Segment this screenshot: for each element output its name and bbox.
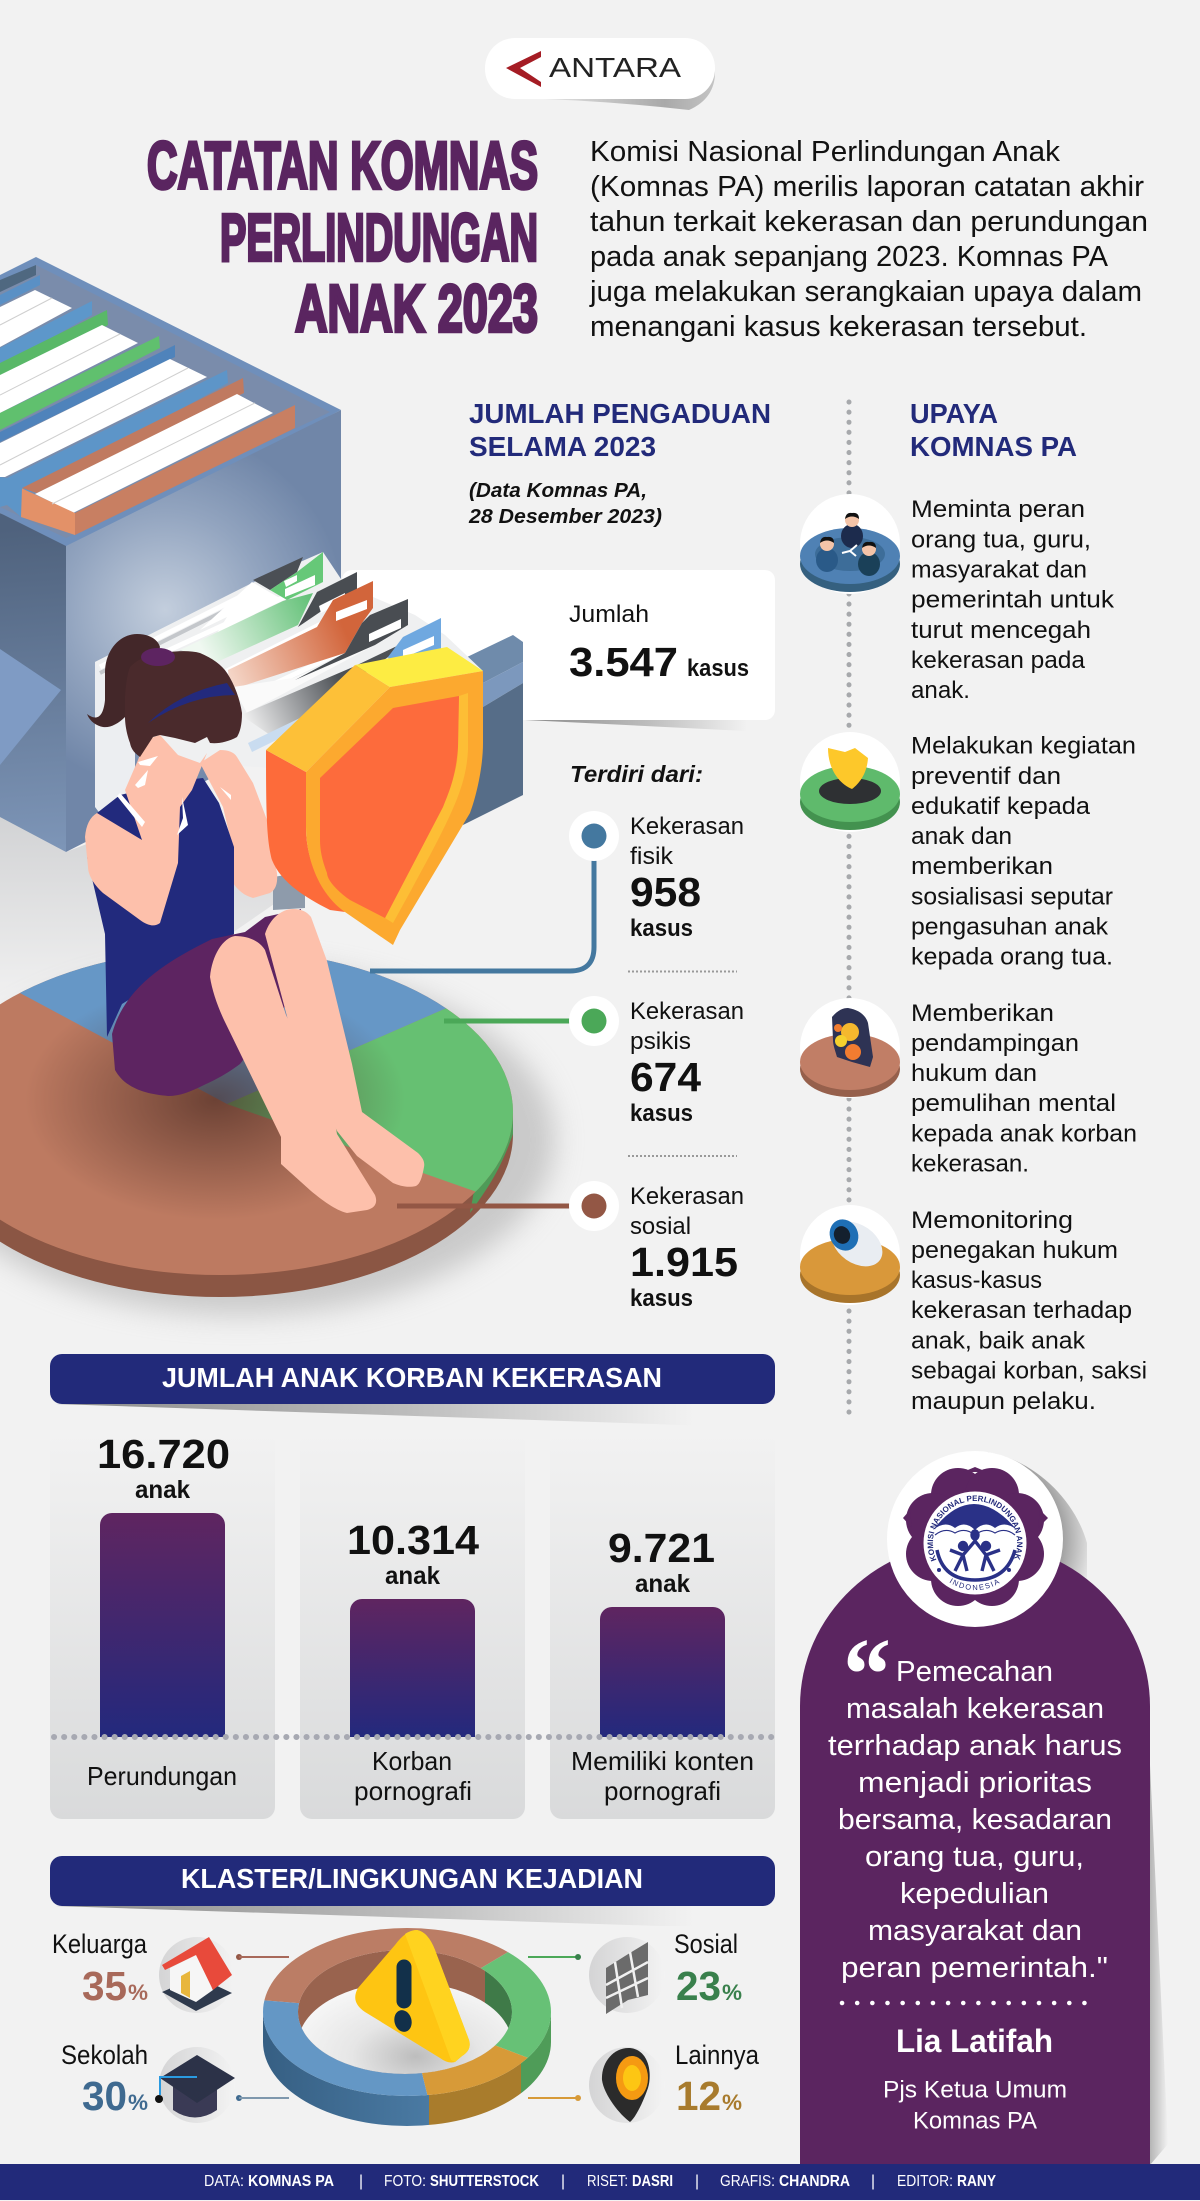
source note [468, 480, 662, 528]
item: kekerasan psikis: kasus [630, 1100, 693, 1127]
label: lainnya 12%: % [722, 2090, 742, 2115]
heading bar: jumlah anak korban: JUMLAH ANAK KORBAN KEKERASAN [162, 1362, 662, 1393]
text: upaya 4: anak, baik anak [911, 1328, 1086, 1354]
label: sosial 23%: 23 [676, 1963, 721, 2009]
icon: location pin [589, 2047, 665, 2123]
subheading: terdiri dari: Terdiri dari: [570, 761, 703, 787]
folder: green [253, 557, 303, 590]
footer credits: DATA: [204, 2173, 244, 2190]
footer credits: | [871, 2173, 875, 2190]
heading bar: klaster: KLASTER/LINGKUNGAN KEJADIAN [181, 1863, 643, 1894]
intro text: tahun terkait kekerasan dan perundungan [590, 206, 1148, 238]
item: kekerasan sosial: 1.915 [630, 1239, 738, 1285]
quote text [828, 1656, 1122, 1984]
source note: 28 Desember 2023) [468, 506, 662, 528]
quote author: Lia Latifah [896, 2023, 1053, 2059]
label: keluarga 35%: Keluarga [52, 1929, 148, 1959]
heading: upaya komnas pa: KOMNAS PA [910, 431, 1077, 462]
heading: jumlah pengaduan: JUMLAH PENGADUAN [469, 398, 771, 429]
girl: headband [148, 683, 235, 723]
label: lainnya 12%: 12 [676, 2073, 721, 2119]
hanging files [0, 265, 295, 535]
emblem: children figures [950, 1531, 1000, 1571]
label: lainnya 12% [675, 2040, 760, 2119]
quote text: orang tua, guru, [865, 1841, 1084, 1873]
footer credits: FOTO: [384, 2173, 426, 2190]
girl: left arm [85, 735, 207, 925]
heading: upaya komnas pa [910, 398, 1077, 462]
footer credits: RISET: [587, 2173, 628, 2190]
intro text: juga melakukan serangkaian upaya dalam [589, 276, 1142, 308]
text: upaya 4: kasus-kasus [911, 1267, 1042, 1294]
quote text: kepedulian [900, 1878, 1049, 1910]
item: kekerasan psikis [569, 996, 744, 1127]
text: upaya 1: turut mencegah [911, 617, 1091, 644]
icon: warning triangle [355, 1930, 470, 2062]
logo: Komnas PA emblem [887, 1451, 1063, 1627]
folder: lower blue strip [248, 718, 305, 752]
intro text: pada anak sepanjang 2023. Komnas PA [590, 241, 1109, 273]
card: jumlah total: Jumlah [569, 601, 649, 628]
column: korban pornografi [300, 1430, 525, 1819]
drawer: white column [95, 642, 135, 860]
text: upaya 2: edukatif kepada [911, 793, 1090, 820]
item: kekerasan fisik: Kekerasan [630, 813, 744, 840]
card: jumlah total [342, 570, 775, 732]
text: upaya 2 [911, 733, 1136, 971]
quote text: terrhadap anak harus [828, 1730, 1122, 1762]
intro text [589, 136, 1148, 343]
drawer: rails [100, 590, 405, 700]
footer credits: | [561, 2173, 565, 2190]
column: memiliki konten pornografi: Memiliki konten [571, 1746, 754, 1776]
icon: shield [266, 647, 483, 945]
connector: sekolah [236, 2095, 289, 2101]
text: upaya 3: kekerasan. [911, 1151, 1029, 1178]
connector: keluarga [236, 1954, 289, 1960]
item: kekerasan psikis: Kekerasan [630, 998, 744, 1025]
label: lainnya 12%: Lainnya [675, 2040, 760, 2070]
quote text: bersama, kesadaran [838, 1804, 1112, 1836]
filing cabinet [0, 257, 341, 852]
text: upaya 2: preventif dan [911, 763, 1061, 790]
text: upaya 3: pemulihan mental [911, 1090, 1116, 1117]
girl: near leg [210, 936, 376, 1213]
column: memiliki konten pornografi [550, 1430, 775, 1819]
heading: jumlah pengaduan [469, 398, 771, 462]
item: kekerasan fisik [569, 811, 744, 942]
pie disc: kekerasan segments [0, 960, 513, 1297]
donut chart: klaster [263, 1928, 551, 2126]
folder: orange [228, 581, 373, 690]
footer credits: | [359, 2173, 363, 2190]
footer credits: EDITOR: [897, 2173, 953, 2190]
intro text: menangani kasus kekerasan tersebut. [590, 311, 1087, 343]
quote panel: shadow [1150, 1765, 1168, 2165]
icon: eye [800, 1205, 900, 1305]
label: keluarga 35%: 35 [82, 1963, 127, 2009]
text: upaya 4: maupun pelaku. [911, 1388, 1096, 1415]
quote text: menjadi prioritas [858, 1767, 1092, 1799]
drawer: end panel [463, 635, 523, 825]
label: keluarga 35%: % [128, 1980, 148, 2005]
open drawer with folders [95, 552, 523, 910]
emblem: flower [903, 1467, 1048, 1606]
quote text: peran pemerintah." [841, 1952, 1108, 1984]
heading bar: jumlah anak korban [50, 1354, 775, 1426]
text: upaya 3: hukum dan [911, 1060, 1037, 1087]
text: upaya 3: kepada anak korban [911, 1120, 1137, 1148]
logo: ANTARA: ANTARA [549, 52, 681, 83]
text: upaya 2: kepada orang tua. [911, 944, 1113, 971]
folder: dark 2 [295, 599, 408, 680]
folder: blue [388, 618, 441, 680]
footer credits: | [695, 2173, 699, 2190]
emblem: indonesia text: INDONESIA [950, 1578, 1000, 1590]
title: ANAK 2023 [295, 272, 538, 346]
footer credits: RANY [957, 2173, 997, 2190]
footer credits: CHANDRA [779, 2173, 850, 2190]
column: perundungan: 16.720 [97, 1431, 230, 1477]
item: kekerasan fisik: kasus [630, 915, 693, 942]
label: sekolah 30%: % [128, 2090, 148, 2115]
connector: sosial [528, 1954, 581, 1960]
icon: shield on green disc [800, 732, 900, 832]
column: perundungan: anak [135, 1476, 190, 1504]
donut: inner wall [298, 1950, 512, 2074]
text: upaya 4: Memonitoring [911, 1207, 1073, 1234]
quote text: Pemecahan [896, 1656, 1053, 1688]
icon: head with gears [800, 998, 900, 1098]
folder: gray band [241, 635, 420, 737]
item: kekerasan sosial: sosial [630, 1213, 691, 1240]
donut: outer wall [263, 2014, 551, 2126]
footer credits: DASRI [632, 2173, 673, 2190]
icon: meeting people [800, 494, 900, 594]
emblem: umbrella lower line [935, 1530, 1015, 1535]
pie disc shadow [0, 965, 555, 1315]
girl: tears [135, 756, 158, 788]
title [147, 128, 538, 346]
text: upaya 1: anak. [911, 677, 970, 704]
emblem: inner circle [924, 1492, 1026, 1594]
emblem: circular text: KOMISI NASIONAL PERLINDUNGAN ANAK [927, 1496, 1023, 1562]
footer credits: SHUTTERSTOCK [430, 2173, 540, 2190]
quote author role [883, 2076, 1067, 2134]
floor shadow [0, 800, 280, 1010]
column: korban pornografi: anak [385, 1562, 440, 1590]
column: korban pornografi: pornografi [354, 1776, 472, 1806]
text: upaya 1: orang tua, guru, [911, 526, 1091, 554]
quote author role: Komnas PA [913, 2108, 1037, 2134]
item: kekerasan sosial: kasus [630, 1285, 693, 1312]
text: upaya 2: memberikan [911, 853, 1053, 880]
text: upaya 3 [911, 1000, 1137, 1178]
logo: ANTARA [485, 38, 715, 110]
icon: graduation cap [155, 2047, 235, 2123]
label: sosial 23%: % [722, 1980, 742, 2005]
column: memiliki konten pornografi: 9.721 [608, 1525, 715, 1571]
cabinet left face [0, 513, 66, 852]
drawer: lower box [273, 872, 305, 910]
text: upaya 3: Memberikan [911, 1000, 1054, 1027]
text: upaya 2: anak dan [911, 823, 1012, 850]
folder: white sheet [233, 637, 390, 713]
girl: main hair [125, 651, 242, 757]
emblem: side dots [937, 1568, 1011, 1572]
cabinet interior [0, 265, 330, 538]
title: PERLINDUNGAN [220, 200, 538, 276]
footer credits: KOMNAS PA [248, 2173, 334, 2190]
text: upaya 2: sosialisasi seputar [911, 884, 1113, 910]
text: upaya 4: kekerasan terhadap [911, 1297, 1132, 1324]
logo disc shadow [987, 1452, 1087, 1578]
item: kekerasan psikis: psikis [630, 1028, 691, 1055]
heading: jumlah pengaduan: SELAMA 2023 [469, 431, 656, 462]
footer credits [0, 2164, 1200, 2200]
illustration: crying girl [85, 634, 424, 1213]
column: perundungan: Perundungan [87, 1761, 237, 1791]
item: kekerasan fisik: fisik [630, 843, 674, 870]
donut: top surface [263, 1928, 551, 2096]
item: kekerasan sosial [569, 1181, 744, 1312]
intro text: Komisi Nasional Perlindungan Anak [590, 136, 1060, 168]
emblem: umbrella [933, 1504, 1017, 1530]
connector: lainnya [528, 2095, 581, 2101]
quote panel: arch body [800, 1541, 1150, 2165]
item: kekerasan sosial: Kekerasan [630, 1183, 744, 1210]
column: perundungan [50, 1430, 275, 1819]
text: upaya 4: penegakan hukum [911, 1237, 1118, 1264]
heading: upaya komnas pa: UPAYA [910, 398, 998, 429]
cabinet left drawer [0, 649, 61, 765]
label: keluarga 35% [52, 1929, 148, 2009]
heading bar: klaster [50, 1856, 775, 1926]
girl: far leg [265, 909, 424, 1187]
girl: skirt [112, 909, 301, 1096]
quote panel [800, 1452, 1168, 2165]
icon: house [159, 1937, 235, 2013]
text: upaya 1: Meminta peran [911, 496, 1085, 523]
text: upaya 1: kekerasan pada [911, 647, 1085, 674]
item: kekerasan psikis: 674 [630, 1054, 701, 1100]
quote author role: Pjs Ketua Umum [883, 2076, 1067, 2104]
emblem: bottom arc [937, 1550, 1015, 1580]
folder: white paper [200, 582, 283, 633]
leader lines for kekerasan categories [370, 836, 594, 1206]
text: upaya 2: pengasuhan anak [911, 914, 1109, 941]
text: upaya 1 [911, 496, 1115, 704]
quote mark: “ [843, 1617, 891, 1732]
girl: right arm [200, 750, 277, 898]
card: jumlah total: kasus [687, 655, 749, 682]
bar chart: jumlah anak korban [50, 1430, 775, 1819]
label: sosial 23%: Sosial [674, 1929, 738, 1959]
icon: map [589, 1937, 665, 2014]
footer credits: GRAFIS: [720, 2173, 775, 2190]
source note: (Data Komnas PA, [469, 480, 647, 502]
girl: right shoulder highlight [220, 787, 231, 800]
quote text: masalah kekerasan [846, 1693, 1104, 1725]
text: upaya 3: pendampingan [911, 1030, 1079, 1057]
label: sekolah 30% [61, 2040, 148, 2119]
column: korban pornografi: 10.314 [347, 1517, 479, 1563]
text: upaya 1: masyarakat dan [911, 557, 1087, 584]
folder: dark 1 [298, 572, 357, 627]
text: upaya 4 [911, 1207, 1147, 1415]
girl: dress [87, 778, 234, 1037]
text: upaya 4: sebagai korban, saksi [911, 1358, 1147, 1385]
girl: ponytail [87, 634, 160, 727]
cabinet top frame [0, 257, 341, 546]
column: memiliki konten pornografi: pornografi [604, 1776, 721, 1806]
girl: collar [117, 793, 188, 835]
intro text: (Komnas PA) merilis laporan catatan akhir [590, 171, 1144, 203]
title: CATATAN KOMNAS [147, 128, 538, 204]
text: upaya 1: pemerintah untuk [911, 587, 1115, 614]
text: upaya 2: Melakukan kegiatan [911, 733, 1136, 760]
column: memiliki konten pornografi: anak [635, 1570, 690, 1598]
cabinet right face [66, 410, 341, 852]
label: sosial 23% [674, 1929, 742, 2009]
girl: hair scrunchie [141, 648, 175, 666]
quote text: masyarakat dan [868, 1915, 1082, 1947]
label: sekolah 30%: 30 [82, 2073, 127, 2119]
drawer: interior [95, 552, 483, 770]
card: jumlah total: 3.547 [569, 639, 678, 685]
label: sekolah 30%: Sekolah [61, 2040, 148, 2070]
column: korban pornografi: Korban [372, 1746, 452, 1776]
quote divider dots [842, 2001, 1098, 2005]
item: kekerasan fisik: 958 [630, 869, 701, 915]
